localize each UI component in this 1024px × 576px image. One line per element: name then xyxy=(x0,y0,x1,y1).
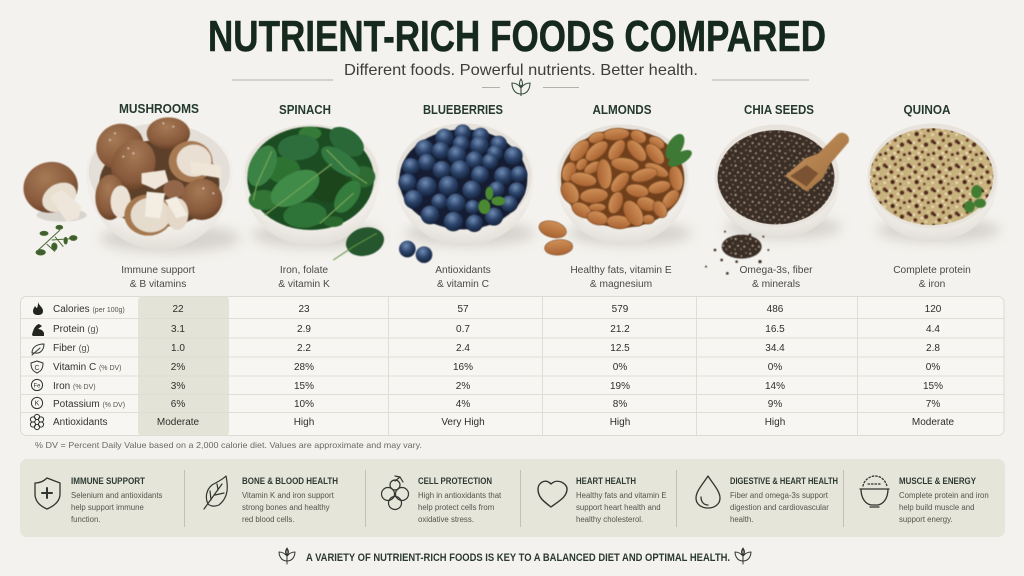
column: mushrooms values: 1.0 xyxy=(171,343,185,354)
food column: spinach xyxy=(242,102,387,290)
food column: blueberries xyxy=(395,102,535,290)
row labels xyxy=(53,304,125,428)
column: almonds values: 21.2 xyxy=(610,324,630,335)
column: almonds values xyxy=(610,304,630,428)
column: quinoa values: 120 xyxy=(925,304,942,315)
icon: berries xyxy=(382,476,408,510)
column: spinach values: 2.9 xyxy=(297,324,311,335)
benefit: heart health: HEART HEALTH xyxy=(576,476,636,486)
column: spinach values: 15% xyxy=(294,381,314,392)
food column: chia seeds: & minerals xyxy=(752,279,800,290)
icon: grain bowl xyxy=(860,476,889,507)
column: quinoa values: Moderate xyxy=(912,417,955,428)
column: chia seeds values: High xyxy=(765,417,785,428)
column: spinach values xyxy=(294,304,314,428)
column: chia seeds values: 0% xyxy=(768,362,782,373)
mushrooms bowl illustration xyxy=(86,116,240,252)
column: spinach values: 2.2 xyxy=(297,343,311,354)
almonds bowl illustration xyxy=(556,123,694,245)
column: chia seeds values xyxy=(765,304,785,428)
benefit: muscle and energy: Complete protein and iron xyxy=(899,491,989,500)
benefit: digestive and heart health: Fiber and omega-3s support xyxy=(730,491,829,500)
description: chia seeds: Omega-3s, fiber xyxy=(739,265,813,276)
column: quinoa values xyxy=(912,304,955,428)
row icons xyxy=(30,302,44,430)
row icons: C xyxy=(34,365,40,372)
quinoa bowl illustration xyxy=(867,123,1000,242)
column: mushrooms values xyxy=(157,304,200,428)
column: quinoa values: 7% xyxy=(926,399,940,410)
column: spinach values: High xyxy=(294,417,314,428)
row icons: K xyxy=(35,400,40,408)
column: mushrooms values: 3.1 xyxy=(171,324,185,335)
wooden scoop xyxy=(785,133,849,192)
food column: almonds: & magnesium xyxy=(590,279,652,290)
column: almonds values: High xyxy=(610,417,630,428)
column: quinoa values: 2.8 xyxy=(926,343,940,354)
benefit: heart health: support heart health and xyxy=(576,503,661,512)
benefit: digestive and heart health: DIGESTIVE & HEART HEALTH xyxy=(730,476,838,486)
benefit: heart health: healthy cholesterol. xyxy=(576,515,643,524)
benefit: muscle and energy: help build muscle and xyxy=(899,503,974,512)
food column: almonds xyxy=(537,102,694,290)
description: spinach: Iron, folate xyxy=(280,265,328,276)
benefit: immune support: Selenium and antioxidants xyxy=(71,491,163,500)
row labels: Protein (g) xyxy=(53,324,98,335)
column: blueberries values: Very High xyxy=(441,417,485,428)
column: quinoa values: 15% xyxy=(923,381,943,392)
column: blueberries values: 16% xyxy=(453,362,473,373)
column: spinach values: 10% xyxy=(294,399,314,410)
loose almonds xyxy=(537,218,573,256)
benefit: cell protection xyxy=(382,476,502,524)
row labels: Iron (% DV) xyxy=(53,381,96,392)
column: mushrooms values: 3% xyxy=(171,381,185,392)
benefit: bone and blood health xyxy=(204,476,338,524)
column: almonds values: 12.5 xyxy=(610,343,630,354)
subtitle: Different foods. Powerful nutrients. Better health. xyxy=(344,62,698,79)
benefit: immune support: help support immune xyxy=(71,503,144,512)
column: almonds values: 8% xyxy=(613,399,627,410)
food column: mushrooms xyxy=(18,101,240,290)
food column: spinach: & vitamin K xyxy=(278,279,330,290)
highlighted mushrooms column xyxy=(138,296,229,436)
spinach bowl illustration xyxy=(242,121,382,248)
column: chia seeds values: 486 xyxy=(767,304,784,315)
food column: mushrooms: & B vitamins xyxy=(130,279,186,290)
table footnote: % DV = Percent Daily Value based on a 2,000 calorie diet. Values are approximate and may vary. xyxy=(35,440,422,450)
column: blueberries values: 0.7 xyxy=(456,324,470,335)
benefit: cell protection: help protect cells from xyxy=(418,503,494,512)
column: chia seeds values: 16.5 xyxy=(765,324,785,335)
footer message: A VARIETY OF NUTRIENT-RICH FOODS IS KEY TO A BALANCED DIET AND OPTIMAL HEALTH. xyxy=(306,552,730,564)
row labels: Potassium (% DV) xyxy=(53,399,125,410)
description: mushrooms: Immune support xyxy=(121,265,195,276)
column: blueberries values: 4% xyxy=(456,399,470,410)
blueberries bowl illustration xyxy=(395,122,535,246)
benefit: cell protection: oxidative stress. xyxy=(418,515,474,524)
benefit: heart health: Healthy fats and vitamin E xyxy=(576,491,667,500)
single mushroom xyxy=(18,156,87,222)
benefit: muscle and energy: support energy. xyxy=(899,515,953,524)
loose spinach leaf xyxy=(333,223,387,260)
column: almonds values: 0% xyxy=(613,362,627,373)
column: mushrooms values: 6% xyxy=(171,399,185,410)
benefit: digestive and heart health: health. xyxy=(730,515,753,524)
icon: water drop xyxy=(696,476,720,508)
column: mushrooms values: 22 xyxy=(172,304,184,315)
row labels: Calories (per 100g) xyxy=(53,304,125,315)
table frame xyxy=(20,296,1004,436)
row labels: Vitamin C (% DV) xyxy=(53,362,122,373)
icon: sprout xyxy=(512,79,530,96)
food column: quinoa xyxy=(867,102,1000,290)
panel: health benefits xyxy=(20,459,1005,537)
benefit: cell protection: High in antioxidants that xyxy=(418,491,502,500)
column: mushrooms values: Moderate xyxy=(157,417,200,428)
column: spinach values: 23 xyxy=(298,304,310,315)
title: NUTRIENT-RICH FOODS COMPARED xyxy=(208,12,826,61)
benefit: heart health xyxy=(538,476,667,524)
description: almonds: Healthy fats, vitamin E xyxy=(570,265,672,276)
column: blueberries values: 2.4 xyxy=(456,343,470,354)
description: blueberries: Antioxidants xyxy=(435,265,491,276)
benefit: digestive and heart health: digestion and cardiovascular xyxy=(730,503,829,512)
column: chia seeds values: 14% xyxy=(765,381,785,392)
column: mushrooms values: 2% xyxy=(171,362,185,373)
header ornament xyxy=(232,79,809,96)
thyme sprig xyxy=(36,225,77,255)
benefit: digestive and heart health xyxy=(696,476,838,524)
description: quinoa: Complete protein xyxy=(893,265,971,276)
heading: almonds: ALMONDS xyxy=(592,102,652,117)
icon: heart xyxy=(538,481,567,507)
column: almonds values: 19% xyxy=(610,381,630,392)
food column: blueberries: & vitamin C xyxy=(437,279,489,290)
heading: blueberries: BLUEBERRIES xyxy=(423,102,503,117)
food column: quinoa: & iron xyxy=(919,279,945,290)
benefit: bone and blood health: Vitamin K and iron support xyxy=(242,491,335,500)
row icons: Fe xyxy=(33,384,41,390)
benefit: immune support: function. xyxy=(71,515,100,524)
benefits background xyxy=(20,459,1005,537)
row labels: Fiber (g) xyxy=(53,343,90,354)
icon: leaf xyxy=(204,476,227,509)
benefit: bone and blood health: BONE & BLOOD HEALTH xyxy=(242,476,338,486)
benefit: bone and blood health: strong bones and healthy xyxy=(242,503,330,512)
column: blueberries values xyxy=(441,304,485,428)
benefit: cell protection: CELL PROTECTION xyxy=(418,476,492,486)
icon: footer sprout right xyxy=(735,548,751,564)
heading: spinach: SPINACH xyxy=(279,102,331,117)
column: almonds values: 579 xyxy=(612,304,629,315)
column: chia seeds values: 34.4 xyxy=(765,343,785,354)
row labels: Antioxidants xyxy=(53,417,107,428)
benefit: muscle and energy: MUSCLE & ENERGY xyxy=(899,476,976,486)
column: blueberries values: 2% xyxy=(456,381,470,392)
nutrition comparison table xyxy=(20,296,1004,436)
benefit: immune support xyxy=(35,476,163,524)
loose blueberries xyxy=(399,241,432,263)
column: spinach values: 28% xyxy=(294,362,314,373)
column: quinoa values: 4.4 xyxy=(926,324,940,335)
icon: shield xyxy=(35,478,60,509)
column: blueberries values: 57 xyxy=(457,304,469,315)
heading: chia seeds: CHIA SEEDS xyxy=(744,102,814,117)
benefit: bone and blood health: red blood cells. xyxy=(242,515,294,524)
chia seeds bowl illustration xyxy=(714,123,849,239)
spilled chia seeds xyxy=(705,231,769,275)
column: chia seeds values: 9% xyxy=(768,399,782,410)
food column: chia seeds xyxy=(705,102,849,290)
benefit: immune support: IMMUNE SUPPORT xyxy=(71,476,145,486)
benefit: muscle and energy xyxy=(860,476,989,524)
heading: mushrooms: MUSHROOMS xyxy=(119,101,199,116)
heading: quinoa: QUINOA xyxy=(904,102,951,117)
column: quinoa values: 0% xyxy=(926,362,940,373)
icon: footer sprout left xyxy=(279,548,295,564)
